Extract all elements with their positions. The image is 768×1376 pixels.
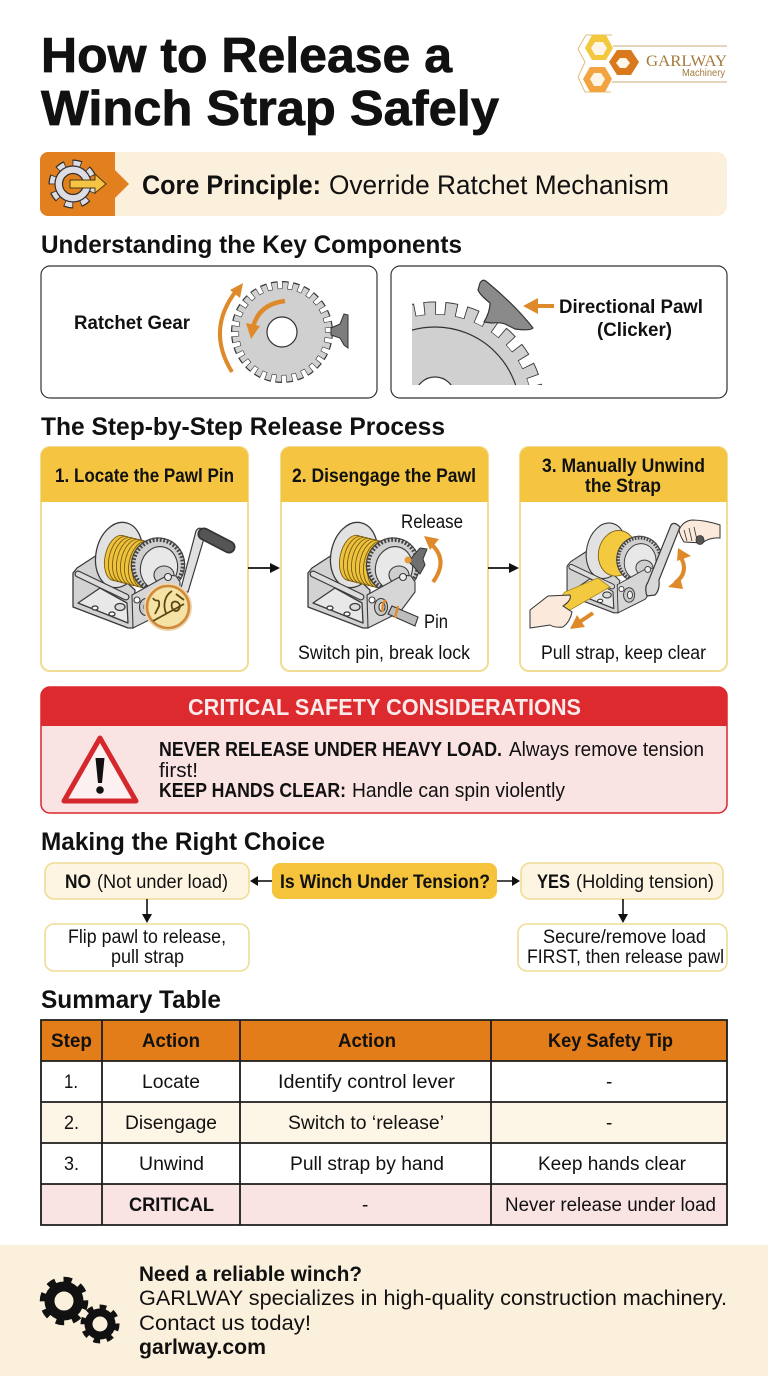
icon: ratchet gear — [236, 286, 348, 378]
label: pin: Pin — [424, 612, 448, 633]
footer text: Contact us today! — [139, 1312, 311, 1335]
illustration: winch with magnifier — [73, 518, 229, 630]
icon: gear with arrow — [53, 164, 106, 204]
table header: Action — [142, 1031, 200, 1052]
illustration: gear close-up — [412, 302, 542, 385]
table header — [51, 1031, 673, 1052]
arrow: step 2 to 3 — [488, 563, 519, 573]
panel: ratchet gear — [41, 266, 377, 398]
label: release: Release — [401, 512, 463, 533]
pawl label — [559, 297, 703, 341]
heading: summary: Summary Table — [41, 986, 221, 1014]
arrow: to yes — [497, 876, 520, 886]
no outcome: Flip pawl to release, — [68, 927, 226, 948]
arrow: yes down — [618, 899, 628, 923]
yes outcome: FIRST, then release pawl — [527, 947, 724, 968]
yes node — [521, 863, 723, 899]
footer text: GARLWAY specializes in high-quality construction machinery. — [139, 1287, 727, 1310]
footer — [0, 1245, 768, 1376]
row 2: Switch to ‘release’ — [288, 1113, 444, 1134]
row 2: 2. — [64, 1113, 79, 1134]
arrow: handle motion — [668, 548, 691, 589]
arrow: release — [424, 536, 441, 582]
panel: directional pawl — [390, 265, 728, 399]
panel: critical safety — [41, 687, 727, 813]
title: How to Release a — [41, 29, 453, 83]
safety text: first! — [159, 760, 198, 782]
yes node: (Holding tension) — [576, 872, 714, 893]
safety text: NEVER RELEASE UNDER HEAVY LOAD. — [159, 739, 502, 761]
row: critical: - — [362, 1195, 368, 1216]
panel: step 1 — [41, 447, 248, 671]
core principle text: Core Principle: — [142, 170, 321, 200]
row 1: Locate — [142, 1072, 200, 1093]
safety text: KEEP HANDS CLEAR: — [159, 780, 346, 802]
row 3: 3. — [64, 1154, 79, 1175]
icon: warning triangle — [64, 738, 136, 801]
step 3 heading — [542, 456, 705, 497]
table header: Action — [338, 1031, 396, 1052]
illustration: winch with hands — [530, 519, 720, 628]
yes outcome — [518, 924, 727, 971]
table: summary — [41, 1020, 727, 1225]
icon: pawl — [478, 280, 533, 330]
yes outcome: Secure/remove load — [543, 927, 706, 948]
row 2 — [64, 1113, 612, 1134]
row 3: Unwind — [139, 1154, 204, 1175]
caption: step 3: Pull strap, keep clear — [541, 643, 707, 664]
row: critical: CRITICAL — [129, 1195, 214, 1216]
core principle text: Override Ratchet Mechanism — [329, 170, 669, 200]
no node — [45, 863, 249, 899]
no outcome — [45, 924, 249, 971]
row 3: Keep hands clear — [538, 1154, 687, 1175]
row 1: 1. — [64, 1072, 78, 1093]
illustration: winch with pawl disengaged — [308, 518, 427, 628]
row 3 — [64, 1154, 687, 1175]
icon: gears — [43, 1280, 117, 1341]
core principle text — [142, 170, 669, 200]
caption: step 2: Switch pin, break lock — [298, 643, 470, 664]
no node: NO — [65, 872, 91, 893]
row: critical: Never release under load — [505, 1195, 716, 1216]
pawl label: (Clicker) — [597, 320, 672, 341]
row 1: - — [606, 1072, 612, 1093]
safety text: Always remove tension — [509, 739, 704, 761]
step 3 heading: 3. Manually Unwind — [542, 456, 705, 477]
decision node — [272, 863, 497, 899]
arrow: pull strap — [570, 613, 593, 629]
panel: step 2 — [281, 447, 488, 671]
heading: right choice: Making the Right Choice — [41, 828, 325, 856]
arrow: no down — [142, 899, 152, 923]
row 2: - — [606, 1113, 612, 1134]
safety heading: CRITICAL SAFETY CONSIDERATIONS — [188, 694, 581, 720]
table header: Key Safety Tip — [548, 1031, 673, 1052]
safety text — [159, 739, 704, 802]
arrow: to no — [250, 876, 272, 886]
footer text: garlway.com — [139, 1336, 266, 1359]
row 1 — [64, 1072, 612, 1093]
table header: Step — [51, 1031, 92, 1052]
footer text: Need a reliable winch? — [139, 1263, 362, 1286]
title — [41, 29, 499, 136]
yes node: YES — [537, 872, 570, 893]
logo: Garlway: GARLWAY — [646, 53, 727, 70]
pawl label: Directional Pawl — [559, 297, 703, 318]
decision node: Is Winch Under Tension? — [280, 872, 490, 893]
panel: core principle — [40, 152, 727, 216]
step 3 heading: the Strap — [585, 476, 661, 497]
arrow: to pawl — [523, 298, 554, 314]
no outcome: pull strap — [111, 947, 184, 968]
no node: (Not under load) — [97, 872, 228, 893]
heading: process: The Step-by-Step Release Process — [41, 413, 445, 441]
footer text — [139, 1263, 727, 1359]
logo: Garlway: Machinery — [682, 68, 725, 79]
arrow: outer rotation — [220, 283, 243, 372]
row: critical — [129, 1195, 716, 1216]
heading: key components: Understanding the Key Components — [41, 231, 462, 259]
logo: Garlway — [578, 35, 727, 92]
row 2: Disengage — [125, 1113, 217, 1134]
arrow: step 1 to 2 — [248, 563, 280, 573]
safety text: Handle can spin violently — [352, 780, 565, 802]
row 3: Pull strap by hand — [290, 1154, 444, 1175]
row 1: Identify control lever — [278, 1072, 456, 1093]
panel: ratchet gear: Ratchet Gear — [74, 313, 191, 334]
panel: step 3 — [520, 447, 727, 671]
arrow: inner rotation — [246, 301, 285, 339]
panel: step 1: 1. Locate the Pawl Pin — [55, 466, 234, 487]
title: Winch Strap Safely — [41, 82, 499, 136]
flowchart: decision — [45, 863, 727, 971]
panel: step 2: 2. Disengage the Pawl — [292, 466, 476, 487]
